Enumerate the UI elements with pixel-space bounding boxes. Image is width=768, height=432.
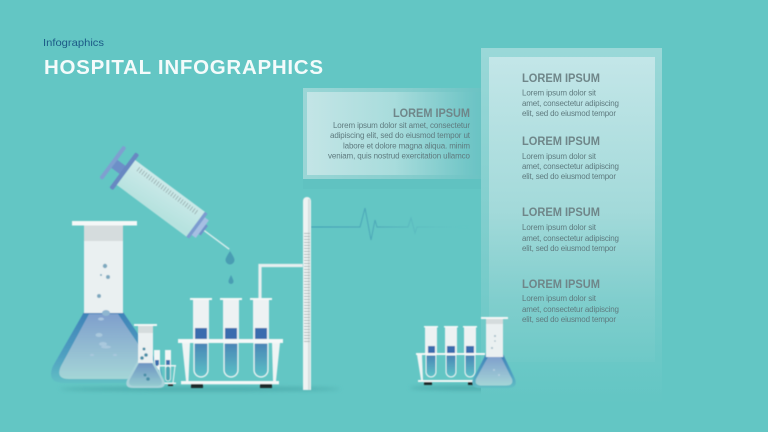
item 3 <box>522 207 619 253</box>
item 1: Lorem ipsum dolor sit <box>522 88 597 98</box>
card body text <box>328 121 471 160</box>
card body text: Lorem ipsum dolor sit amet, consectetur <box>333 121 470 130</box>
item 4: amet, consectetur adipiscing <box>522 305 619 314</box>
title: HOSPITAL INFOGRAPHICS <box>44 56 323 79</box>
item 4: Lorem ipsum dolor sit <box>522 294 597 303</box>
item 2 <box>522 136 619 181</box>
item 4: elit, sed do eiusmod tempor <box>522 315 616 324</box>
icon: small flask <box>126 324 165 388</box>
icon: tiny test tube rack <box>154 350 176 386</box>
item 3: LOREM IPSUM <box>522 207 600 219</box>
floor shadow: right group <box>410 386 540 390</box>
tube 1 <box>190 298 212 377</box>
card heading: LOREM IPSUM <box>393 108 470 120</box>
item 2: amet, consectetur adipiscing <box>522 162 619 171</box>
item 2: elit, sed do eiusmod tempor <box>522 172 616 181</box>
card body text: adipiscing elit, sed do eiusmod tempor ut <box>330 131 471 140</box>
tube 2 <box>220 298 242 377</box>
icon: connecting tube <box>260 266 303 305</box>
panel: top text card <box>303 88 481 189</box>
icon: right test tube rack <box>416 326 485 385</box>
icon: large flask <box>51 221 162 383</box>
item 4: LOREM IPSUM <box>522 279 600 291</box>
icon: drop small <box>228 275 234 284</box>
right tube 1 <box>424 326 438 377</box>
item 3: Lorem ipsum dolor sit <box>522 223 597 232</box>
item 2: Lorem ipsum dolor sit <box>522 152 597 161</box>
item 3: elit, sed do eiusmod tempor <box>522 244 616 253</box>
panel: tall text card <box>481 48 662 404</box>
card body text: labore et dolore magna aliqua. minim <box>343 142 470 150</box>
icon: thermometer column <box>303 197 311 390</box>
ECG line <box>311 208 470 240</box>
icon: syringe <box>98 144 242 267</box>
item 3: amet, consectetur adipiscing <box>522 234 619 243</box>
icon: drop large <box>226 251 234 264</box>
icon: test tube rack <box>178 298 283 388</box>
item 4 <box>522 279 619 324</box>
item 1 <box>522 73 619 118</box>
item 2: LOREM IPSUM <box>522 136 600 148</box>
subtitle: Infographics <box>43 37 104 49</box>
right tube 2 <box>444 326 458 377</box>
item 1: amet, consectetur adipiscing <box>522 99 619 108</box>
tube 3 <box>250 298 272 377</box>
card body text: veniam, quis nostrud exercitation ullamco <box>328 152 471 160</box>
right tube 3 <box>463 326 477 377</box>
item 1: LOREM IPSUM <box>522 73 600 85</box>
floor shadow: left group <box>60 387 340 391</box>
icon: right flask <box>472 317 516 388</box>
item 1: elit, sed do eiusmod tempor <box>522 109 616 118</box>
